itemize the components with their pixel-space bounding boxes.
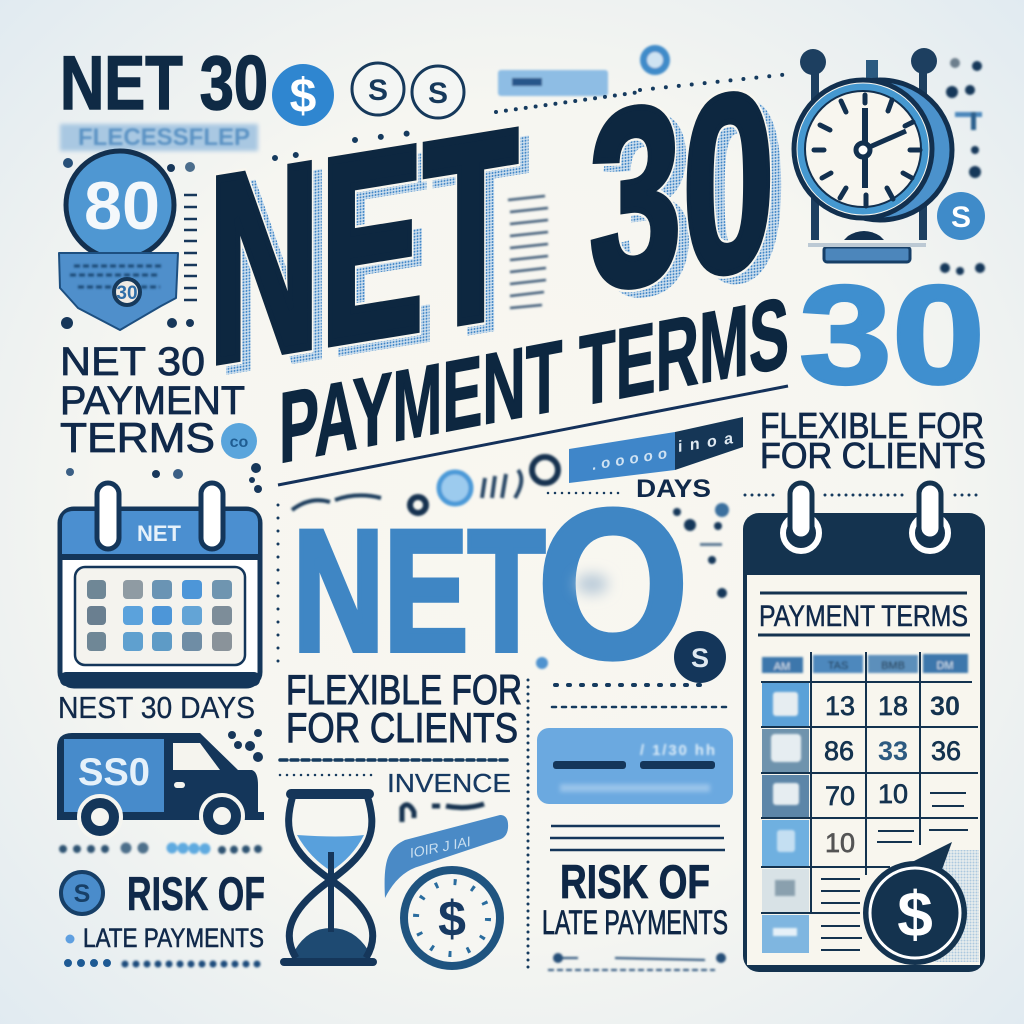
badge: 30 circle: 80 [84,168,160,244]
scattered marks by subtitle [66,463,262,493]
table column headers: TAS [828,660,848,672]
text block: flexible for clients: FOR CLIENTS [286,704,518,751]
table column headers: DM [936,660,954,672]
table column headers [762,654,968,673]
icon: blue s coin [937,192,985,240]
big blue 30: 30 [799,256,985,413]
text block: flexible for clients: FLEXIBLE FOR [286,666,522,713]
icon: outlined coin one: S [368,74,388,107]
title halo: 30 [589,36,775,344]
halftone behind coin [935,850,979,962]
icon: left calendar [60,483,260,686]
truck exhaust marks [228,729,263,762]
blue flag [385,815,508,898]
table numbers: 18 [878,691,908,721]
blue flag: IOIR J IAI [410,833,471,861]
text block: risk of late payments centre: LATE PAYMENTS [542,904,728,942]
text block: flexible for clients top: FOR CLIENTS [760,435,986,476]
ribbon [59,253,178,330]
table column headers: BMB [881,660,905,672]
calendar rings [783,483,948,551]
icon: dark dollar coin: S [691,643,709,673]
scribble under label [402,804,484,822]
icon: left calendar: NET [137,521,182,546]
slanted banner [569,417,743,483]
title shadow: 30 [600,44,786,352]
dollar coin on calendar [863,842,967,965]
blue card [537,728,733,804]
blue net o: NET [293,495,545,687]
icon: clock coin: $ [438,891,466,947]
text block: risk of late payments centre: RISK OF [560,855,710,908]
table numbers: 86 [824,736,854,766]
table column headers: AM [774,661,790,673]
dotted dividers [278,493,982,970]
table numbers: 10 [878,779,908,809]
text block: flexible for clients top [760,405,986,476]
table row icons [762,683,809,953]
text block: risk of late payments left: RISK OF [127,867,265,920]
table numbers: 10 [825,828,855,858]
ticks beside badge [61,158,197,329]
calendar heading: PAYMENT TERMS [759,600,968,633]
decorative dots row [63,848,262,964]
top blue tag [498,45,670,96]
panel: payment terms calendar [743,483,985,972]
icon: outlined coin one [352,63,404,115]
slanted banner: .ooooo [592,445,667,474]
icon: hourglass [280,789,377,966]
icon: delivery truck: SS0 [78,751,150,794]
text block: net 30 payment terms [60,340,245,461]
title: net: NET [208,73,518,420]
dollar coin on calendar: $ [897,878,933,950]
slanted banner: inoa [678,429,734,456]
title shadow: NET [218,82,528,429]
speed lines [508,196,548,308]
text block: risk of late payments centre [542,855,728,942]
lower lines [548,954,725,970]
icon: clock coin [404,870,500,966]
table numbers: 36 [931,736,961,766]
label: days: DAYS [636,475,711,503]
text block: flexible for clients top: FLEXIBLE FOR [760,405,984,446]
icon: outlined coin two: S [428,77,448,110]
icon: dark dollar coin [674,631,726,683]
table numbers [824,691,961,858]
text block: net 30 payment terms: PAYMENT [60,379,245,423]
ribbon: 30 [116,283,138,304]
text block: net 30 payment terms: TERMS [60,414,215,461]
decorative marks near clock [940,58,985,275]
title halo: NET [208,73,518,420]
text block: net 30 payment terms: NET 30 [60,340,205,384]
decorative dots top [275,74,790,158]
table numbers: 70 [825,781,855,811]
icon: outlined coin two [412,66,464,118]
text block: risk of late payments left: LATE PAYMENTS [83,923,264,953]
icon: blue s coin: S [951,201,971,234]
table numbers: 30 [930,691,960,721]
blue card: / 1/30 hh [640,742,715,759]
icon: small blue circle [221,423,257,459]
heading: small net 30: NET 30 [60,41,268,126]
underline [278,386,788,485]
label: invence: INVENCE [387,768,511,798]
icon: blue dollar coin [272,64,334,126]
icon: delivery truck [57,733,264,838]
table grid [761,652,978,913]
badge: 30 circle [66,151,174,259]
blue net o: O [537,465,689,702]
icon: blue dollar coin: $ [290,70,317,123]
scribble icons row [292,457,558,513]
table placeholder lines [821,793,968,950]
label: nest 30 days: NEST 30 DAYS [58,690,255,725]
table numbers: 33 [878,736,908,766]
title: 30: 30 [589,36,775,344]
table numbers: 13 [825,691,855,721]
icon: risk coin: S [74,880,90,908]
three lines [550,826,725,850]
scattered marks right of o [536,503,729,669]
blurred banner: FLECESSFLEP [78,124,250,151]
icon: risk coin [61,872,103,914]
icon: alarm clock [794,48,952,262]
text block: flexible for clients [286,666,522,751]
icon: small blue circle: co [230,434,249,451]
text block: risk of late payments left [83,867,265,953]
